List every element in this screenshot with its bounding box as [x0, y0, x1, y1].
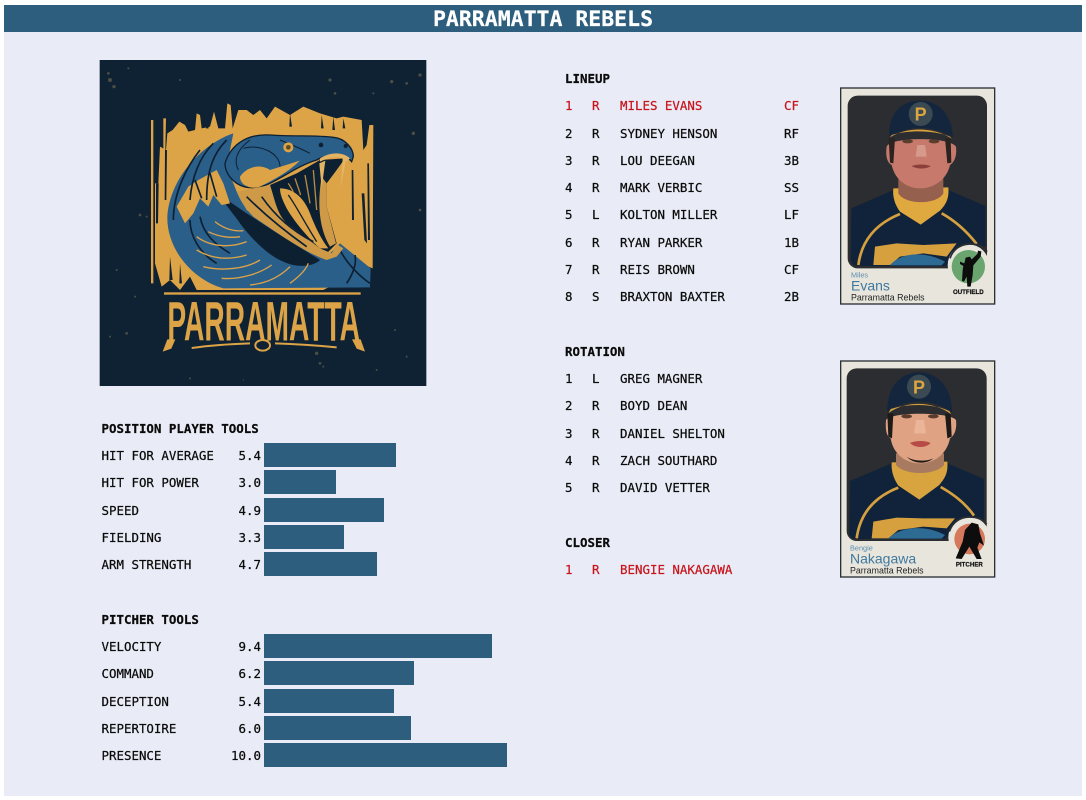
chart: position player tools: HIT FOR POWER [102, 475, 199, 490]
list: lineup: 3 [565, 153, 572, 168]
chart: position player tools: SPEED [102, 503, 139, 518]
chart: position player tools: 3.3 [239, 530, 261, 545]
list: rotation: DANIEL SHELTON [620, 426, 725, 440]
list: rotation: 3 [565, 426, 572, 440]
chart: pitcher tools: 6.0 [239, 721, 261, 736]
snake body [167, 133, 371, 288]
section heading: pitcher tools: PITCHER TOOLS [102, 612, 199, 627]
list: lineup: REIS BROWN [620, 262, 695, 277]
list: lineup: R [592, 262, 600, 277]
list: rotation: R [592, 426, 600, 440]
list: lineup: LF [784, 207, 799, 222]
jersey [851, 190, 985, 266]
list: lineup: R [592, 234, 600, 250]
row: speed [102, 498, 384, 522]
chart: pitcher tools: PRESENCE [102, 748, 161, 763]
nostrils [319, 143, 323, 147]
section heading: position player tools: POSITION PLAYER TOOLS [102, 421, 259, 436]
list: lineup: 2B [784, 289, 799, 304]
player name: Bengie [850, 543, 873, 552]
portrait panel [847, 368, 987, 541]
portrait panel [848, 96, 987, 268]
lower jaw [237, 185, 343, 260]
row: arm strength [102, 552, 377, 576]
list: lineup: RYAN PARKER [620, 234, 702, 250]
list: rotation: ZACH SOUTHARD [620, 453, 717, 468]
row: hit for average [102, 443, 396, 467]
cheek highlight [240, 161, 300, 188]
list: lineup: SS [784, 180, 799, 195]
throat shadow [220, 195, 320, 266]
section heading: rotation: ROTATION [565, 344, 625, 359]
list: lineup: R [592, 126, 600, 141]
list: lineup: LOU DEEGAN [620, 153, 695, 168]
list: lineup: L [592, 207, 600, 222]
chart: pitcher tools: DECEPTION [102, 694, 169, 709]
title [4, 5, 1082, 32]
list: lineup: CF [784, 262, 799, 277]
list: rotation: 2 [565, 398, 572, 413]
list: lineup: 1B [784, 234, 799, 250]
snake [167, 133, 371, 288]
section heading: lineup: LINEUP [565, 71, 610, 86]
list: lineup: BRAXTON BAXTER [620, 289, 725, 304]
wordmark flared ends [163, 339, 365, 352]
row: deception [102, 689, 394, 713]
chart: pitcher tools: 10.0 [231, 748, 261, 763]
list: lineup: S [592, 289, 600, 304]
row: fielding [102, 525, 344, 549]
cap [889, 101, 953, 137]
list: lineup: KOLTON MILLER [620, 207, 717, 222]
chart: pitcher tools: REPERTOIRE [102, 721, 176, 736]
row: velocity [102, 634, 492, 658]
face [886, 414, 956, 463]
list: rotation: R [592, 453, 600, 468]
list: lineup: R [592, 98, 600, 113]
snake head [225, 135, 353, 188]
list: lineup: 3B [784, 153, 799, 168]
list: rotation: GREG MAGNER [620, 371, 702, 386]
list: rotation: DAVID VETTER [620, 480, 710, 495]
inner cheek [319, 177, 336, 247]
wordmark rule [164, 292, 361, 295]
list: lineup: SYDNEY HENSON [620, 126, 717, 141]
list: lineup: 1 [565, 98, 572, 113]
row: hit for power [102, 470, 336, 494]
body bands [177, 170, 230, 223]
eye [283, 142, 293, 152]
tongue [280, 188, 328, 248]
chart: position player tools: ARM STRENGTH [102, 557, 191, 572]
list: lineup: 2 [565, 126, 572, 141]
chart: position player tools: 4.9 [239, 503, 261, 518]
player card: Bengie Nakagawa [840, 360, 996, 578]
neck and collar [892, 462, 947, 500]
chart: pitcher tools: 5.4 [239, 694, 261, 709]
fangs and lip [319, 153, 350, 188]
player name: Miles [851, 270, 868, 279]
position badge [948, 244, 989, 296]
title: PARRAMATTA REBELS [433, 7, 653, 32]
list: rotation: L [592, 371, 600, 386]
player card: Bengie Nakagawa: Parramatta Rebels [850, 565, 924, 575]
chart: position player tools: FIELDING [102, 530, 161, 545]
chart: position player tools: HIT FOR AVERAGE [102, 448, 214, 463]
row: command [102, 661, 414, 685]
row: presence [102, 743, 507, 767]
list: lineup: 6 [565, 234, 572, 250]
chart: pitcher tools: COMMAND [102, 666, 154, 681]
list: closer: R [592, 562, 600, 577]
list: closer: 1 [565, 562, 572, 577]
list: closer: BENGIE NAKAGAWA [620, 562, 732, 577]
chart: position player tools: 3.0 [239, 475, 261, 490]
team logo [100, 60, 426, 386]
cap [887, 372, 952, 412]
list: rotation: R [592, 398, 600, 413]
face [886, 139, 956, 188]
neck and collar [893, 187, 948, 225]
chart: pitcher tools: 9.4 [239, 639, 261, 654]
chart: pitcher tools: 6.2 [239, 666, 261, 681]
list: rotation: 1 [565, 371, 572, 386]
player card: Miles Evans: Evans [851, 277, 890, 293]
list: rotation: R [592, 480, 600, 495]
player card: Bengie Nakagawa: Nakagawa [850, 550, 916, 566]
position badge: OUTFIELD [953, 289, 984, 296]
list: lineup: MILES EVANS [620, 98, 702, 113]
player card: Miles Evans: Parramatta Rebels [851, 292, 925, 302]
row: repertoire [102, 716, 411, 740]
section heading: closer: CLOSER [565, 535, 610, 550]
detached brush strokes [151, 118, 166, 283]
wordmark ornament [192, 343, 337, 348]
player card: Bengie Nakagawa: P [913, 377, 925, 397]
list: lineup: R [592, 153, 600, 168]
list: lineup: RF [784, 126, 799, 141]
position badge: PITCHER [956, 562, 983, 569]
player card: Miles Evans [840, 87, 996, 305]
player card: Miles Evans: P [915, 105, 927, 125]
chart: pitcher tools: VELOCITY [102, 639, 161, 654]
list: lineup: 4 [565, 180, 572, 195]
list: lineup: R [592, 180, 600, 195]
chart: position player tools: 5.4 [239, 448, 261, 463]
yellow brushed backdrop [155, 103, 373, 290]
position badge [948, 517, 990, 569]
list: lineup: CF [784, 98, 799, 113]
list: rotation: BOYD DEAN [620, 398, 687, 413]
list: rotation: 4 [565, 453, 572, 468]
list: lineup: 5 [565, 207, 572, 222]
mouth interior [270, 158, 345, 253]
list: lineup: 8 [565, 289, 572, 304]
list: lineup: MARK VERBIC [620, 180, 702, 195]
list: rotation: 5 [565, 480, 572, 495]
chart: position player tools: 4.7 [239, 557, 261, 572]
list: lineup: 7 [565, 262, 572, 277]
jersey [849, 463, 984, 539]
